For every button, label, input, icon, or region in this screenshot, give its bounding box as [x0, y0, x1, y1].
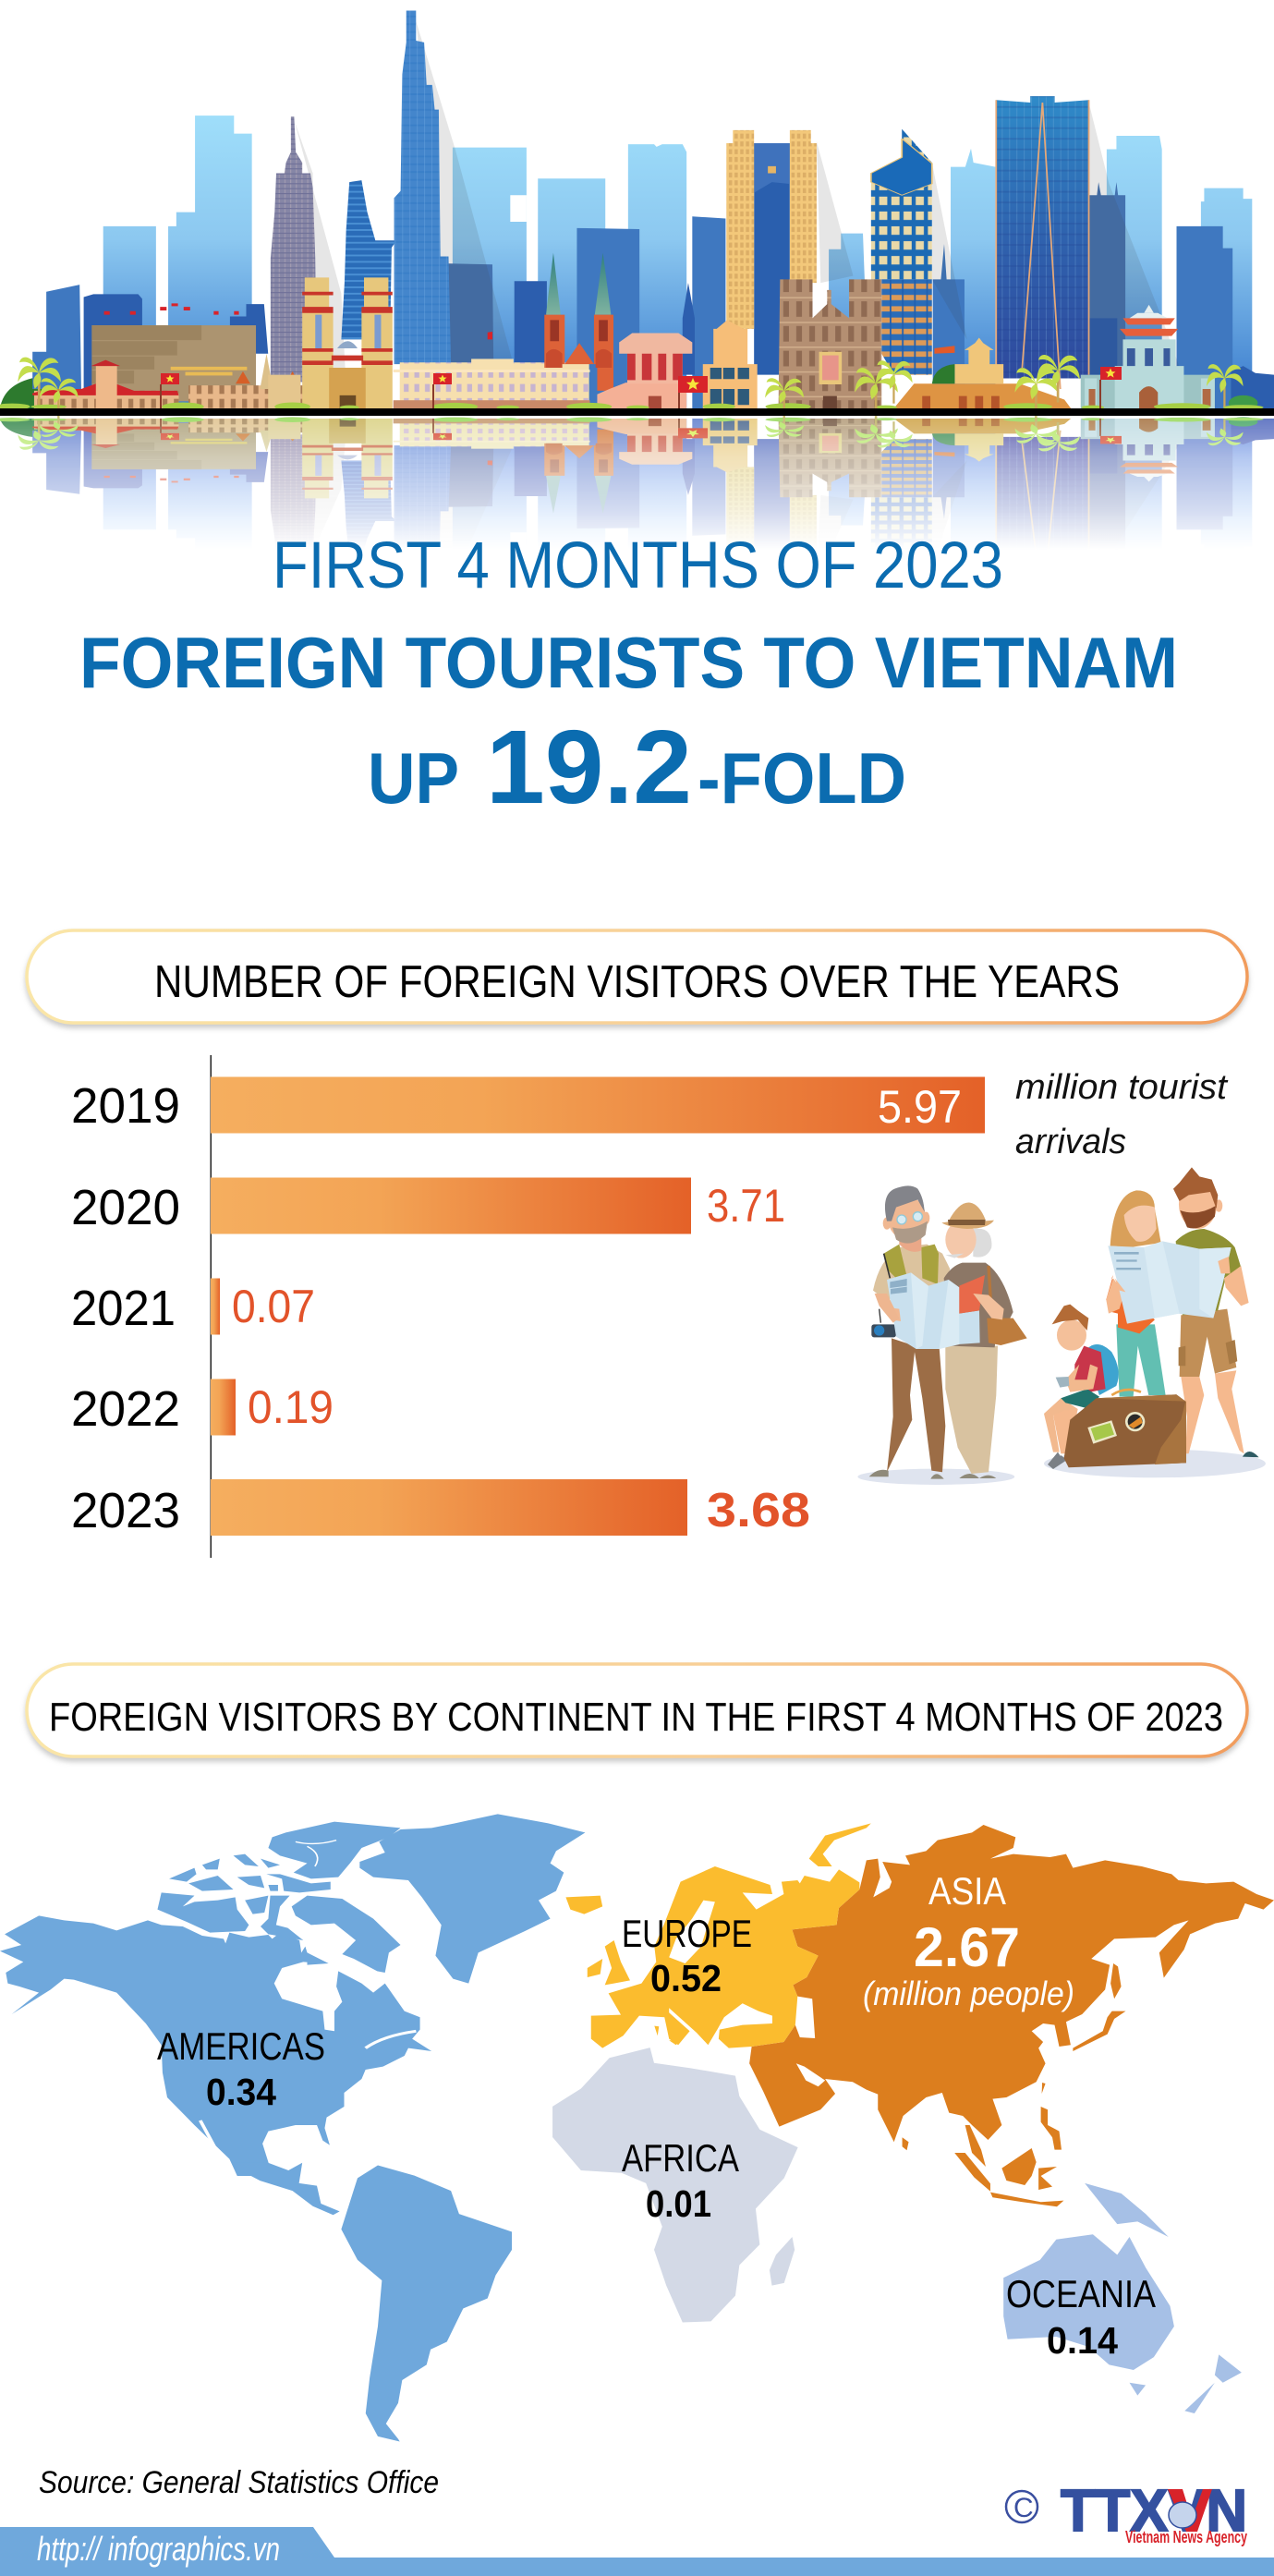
bar 2021 — [71, 1279, 315, 1336]
bar 2020: 2020 — [71, 1180, 180, 1235]
unit note: million tourist — [1015, 1068, 1228, 1107]
label: Africa — [622, 2136, 739, 2225]
logo: TTXVN: TTXVN — [1061, 2477, 1247, 2544]
bar 2019 — [71, 1077, 985, 1134]
bar 2023 — [71, 1479, 810, 1538]
world map — [0, 1814, 1274, 2441]
footer bar — [0, 2527, 1274, 2576]
map held by grandparents — [875, 1272, 1004, 1349]
bar 2019: 5.97 — [878, 1081, 962, 1133]
bar chart — [71, 1055, 985, 1558]
region: Asia — [749, 1825, 1274, 2206]
label: Asia — [863, 1869, 1074, 2012]
figure: mother — [1106, 1190, 1166, 1397]
label: Europe — [622, 1912, 752, 1999]
bar 2023: 3.68 — [707, 1484, 810, 1537]
title line: up 19.2-fold: -FOLD — [698, 737, 906, 819]
section header: visitors over the years — [27, 930, 1247, 1023]
unit note — [1015, 1068, 1228, 1161]
title line: up 19.2-fold: UP — [368, 737, 459, 819]
unit note: arrivals — [1015, 1123, 1126, 1161]
bar 2021: 0.07 — [232, 1281, 315, 1332]
figure: old woman — [941, 1203, 1027, 1478]
label: Africa: 0.01 — [646, 2182, 711, 2225]
source note: Source: General Statistics Office — [39, 2465, 439, 2500]
skyline reflection — [0, 416, 1274, 543]
label: Asia: (million people) — [863, 1975, 1074, 2012]
map held by parents — [1108, 1241, 1232, 1324]
bar 2019: 2019 — [71, 1078, 180, 1134]
label: Africa: AFRICA — [622, 2136, 739, 2180]
region: Africa — [552, 2047, 798, 2322]
label: Americas: AMERICAS — [157, 2024, 325, 2068]
illustration: tourists — [857, 1167, 1266, 1485]
copyright mark: C — [1013, 2493, 1034, 2523]
label: Asia: 2.67 — [914, 1916, 1020, 1978]
bar 2021: 2021 — [71, 1281, 176, 1336]
title line: first 4 months: FIRST 4 MONTHS OF 2023 — [273, 529, 1003, 602]
label: Americas: 0.34 — [206, 2071, 276, 2113]
footer url: http:// infographics.vn — [37, 2530, 280, 2568]
label: Oceania: 0.14 — [1047, 2319, 1118, 2362]
copyright mark — [1006, 2491, 1037, 2523]
region: Europe — [565, 1823, 871, 2048]
title line: up 19.2-fold: 19.2 — [486, 709, 692, 825]
bar 2022 — [71, 1379, 334, 1437]
bar 2022: 0.19 — [248, 1381, 334, 1433]
region: Oceania — [1003, 2183, 1242, 2413]
bar 2020 — [71, 1177, 785, 1235]
label: Oceania: OCEANIA — [1006, 2272, 1156, 2315]
ground line — [0, 408, 1274, 416]
label: Europe: 0.52 — [650, 1957, 722, 1999]
title line: foreign tourists: FOREIGN TOURISTS TO VIETNAM — [79, 622, 1178, 703]
section header: visitors over the years: NUMBER OF FOREIGN VISITORS OVER THE YEARS — [154, 957, 1120, 1007]
label: Europe: EUROPE — [622, 1912, 752, 1955]
region: Americas — [0, 1814, 585, 2441]
title block — [79, 529, 1178, 825]
bar 2020: 3.71 — [707, 1180, 785, 1232]
label: Americas — [157, 2024, 325, 2113]
label: Asia: ASIA — [928, 1869, 1006, 1913]
figure: boy on suitcase — [1044, 1305, 1119, 1469]
suitcase — [1064, 1390, 1186, 1467]
section header: visitors by continent — [27, 1664, 1247, 1756]
title line: up 19.2-fold — [368, 709, 906, 825]
label: Oceania — [1006, 2272, 1156, 2362]
bar 2022: 2022 — [71, 1381, 180, 1437]
bar 2023: 2023 — [71, 1483, 180, 1538]
figure: old man — [869, 1185, 950, 1479]
figure: father — [1173, 1167, 1259, 1457]
skyline illustration — [0, 10, 1274, 416]
